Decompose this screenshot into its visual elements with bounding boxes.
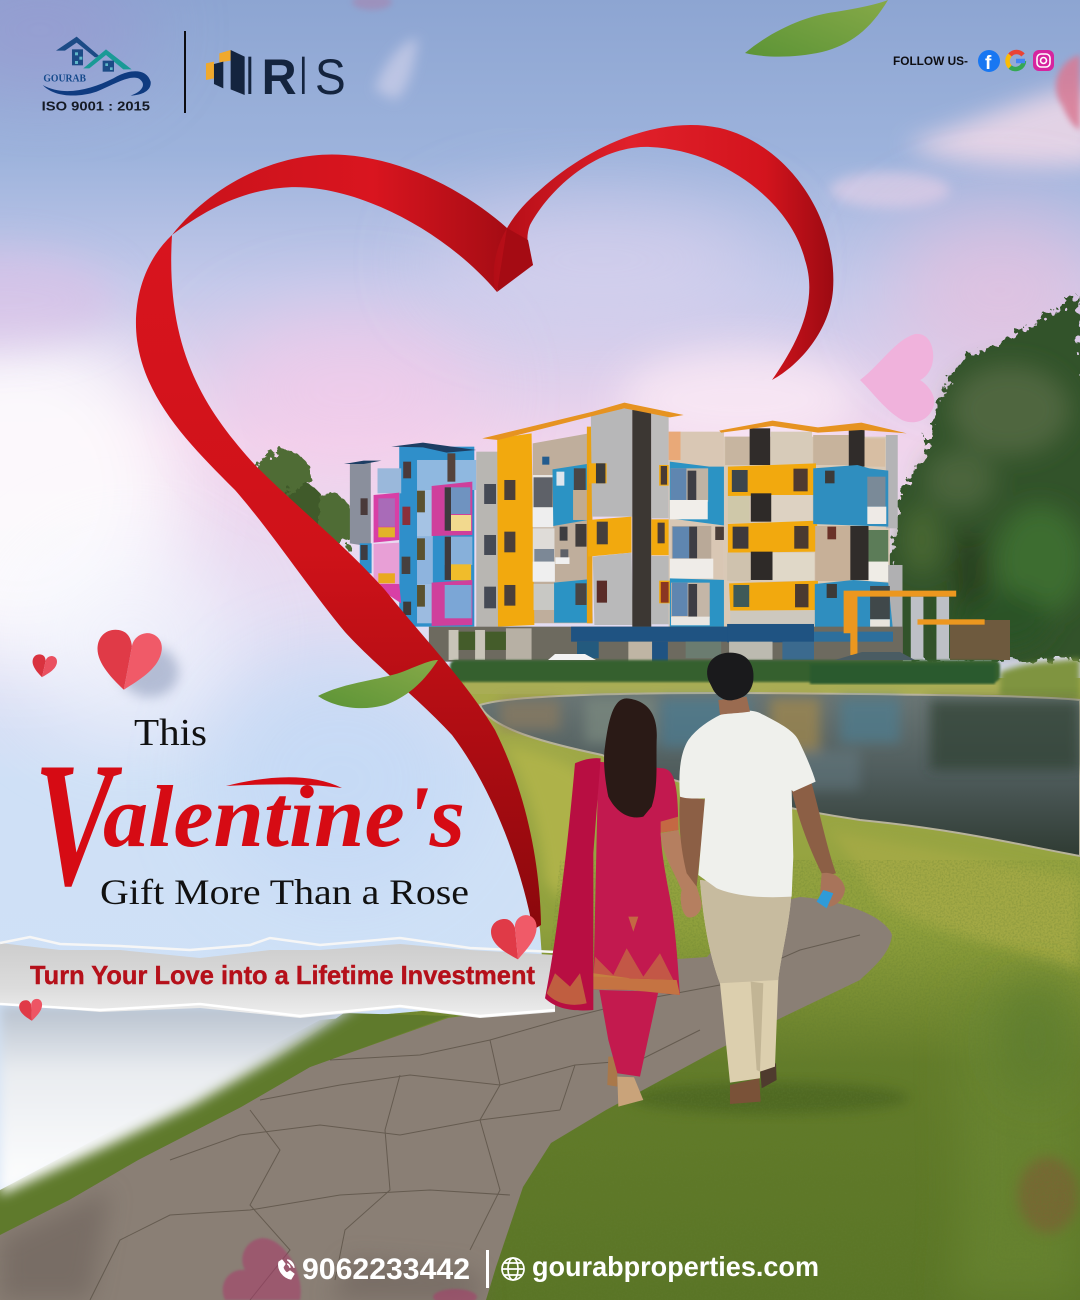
- logo: IRIS: S: [315, 49, 346, 105]
- logo: Gourab: [42, 37, 151, 114]
- stone path: [0, 897, 892, 1300]
- couple: [545, 653, 845, 1107]
- icon: facebook: f: [985, 53, 992, 74]
- phone number: 9062233442: [302, 1253, 470, 1286]
- pond: [480, 693, 1080, 856]
- paper heart under strip: [19, 998, 43, 1022]
- ribbon: fold: [497, 228, 533, 292]
- blurred pink petal top right: [1056, 55, 1080, 130]
- icon: phone: [279, 1260, 294, 1279]
- ribbon: top left band: [172, 154, 507, 292]
- building: centre block: [476, 403, 684, 630]
- far grass bank and shrub: [465, 658, 1080, 698]
- logo: Gourab wordmark: GOURAB: [43, 73, 86, 84]
- paper heart small: [30, 653, 58, 679]
- building: left wing: [344, 443, 476, 627]
- hedge and cars: [450, 652, 1000, 684]
- icon: globe: [502, 1258, 524, 1280]
- couple: man: [679, 653, 845, 1104]
- logo: ISO line: ISO 9001 : 2015: [42, 100, 150, 114]
- footer contact: [279, 1250, 819, 1288]
- logo divider: [184, 31, 186, 113]
- building: right wing: [719, 421, 907, 633]
- pergola beyond gate: [950, 620, 1010, 660]
- tagline: Turn Your Love into a Lifetime Investment: [30, 960, 535, 990]
- pink heart right: [860, 334, 934, 422]
- headline: Valentine's: V: [34, 725, 122, 923]
- website: gourabproperties.com: [532, 1251, 819, 1282]
- logo: IRIS wordmark: R: [262, 49, 297, 105]
- follow us: [893, 50, 1054, 74]
- headline: This: This: [134, 712, 207, 754]
- follow us label: FOLLOW US-: [893, 54, 968, 68]
- building: [344, 403, 985, 662]
- blurred hearts bottom: [223, 1238, 477, 1300]
- lower left fog: [0, 1005, 360, 1195]
- torn paper strip: [0, 937, 555, 1018]
- headline: Valentine's: alentine's: [103, 769, 465, 866]
- ground: grass: [0, 678, 1080, 1300]
- footer divider: [486, 1250, 489, 1288]
- grass texture: [0, 860, 1080, 1300]
- couple: woman: [545, 698, 702, 1107]
- blurred petal top centre: [352, 0, 392, 10]
- headline: Gift More Than a Rose: Gift More Than a Rose: [100, 872, 469, 912]
- leaf: top green: [745, 0, 888, 57]
- paper heart on ribbon end: [489, 914, 541, 963]
- paper heart large: [92, 626, 184, 701]
- icon: instagram: [1033, 50, 1054, 71]
- grass highlights: [505, 745, 1080, 1300]
- icon: facebook: [978, 50, 1000, 74]
- grass edge beside path: [0, 1013, 450, 1235]
- ribbon: right lobe: [494, 125, 833, 380]
- ribbon heart: [136, 125, 833, 930]
- headline: t-bar brush swash: [226, 777, 342, 788]
- ribbon: lower sweep: [136, 235, 541, 930]
- icon: google: [1008, 52, 1025, 69]
- building: right-centre balconies: [659, 432, 729, 632]
- tree: left of building: [255, 450, 354, 550]
- leaf: on ribbon: [318, 660, 438, 708]
- headline: Valentine's: [34, 725, 465, 923]
- building: ground floor: [429, 624, 903, 662]
- logo: IRIS: [206, 49, 346, 105]
- building: orange entrance gate: [844, 591, 985, 660]
- tree: right side: [888, 295, 1080, 660]
